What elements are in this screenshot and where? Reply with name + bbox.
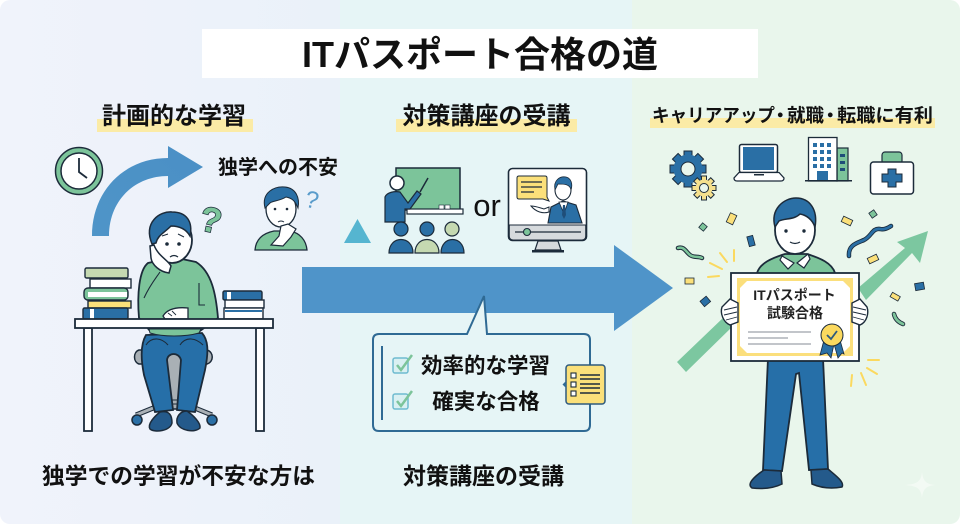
- confetti: [685, 210, 925, 307]
- heading: career: [650, 105, 935, 128]
- icon: gears: [670, 151, 716, 200]
- ribbons: [678, 226, 903, 324]
- left scene: person studying at desk: [75, 212, 273, 431]
- icon: office building: [805, 138, 852, 182]
- title: ITパスポート合格の道: [302, 34, 658, 75]
- torso: [138, 259, 218, 334]
- text: or: or: [473, 188, 501, 223]
- triangle marker: [344, 219, 371, 243]
- collar: [780, 254, 810, 269]
- heading: planned study: 計画的な学習: [102, 103, 246, 130]
- supporting hand: [150, 245, 171, 273]
- shoes: [750, 469, 843, 488]
- heading: career: 転職に有利: [837, 105, 933, 126]
- text: anxiety about self study: 独学への不安: [218, 156, 338, 179]
- certificate: ITパスポート: [753, 287, 836, 303]
- callout: benefits: [373, 296, 605, 431]
- head: [775, 206, 815, 254]
- head: [152, 217, 192, 263]
- heading: course: 対策講座の受講: [402, 103, 570, 130]
- desk: [75, 319, 273, 431]
- rays: [708, 250, 879, 386]
- curved arrow: [92, 146, 203, 236]
- icon: laptop: [734, 144, 784, 181]
- books left stack: [83, 268, 131, 319]
- badge: [820, 324, 844, 358]
- icon: checklist note: [562, 365, 605, 404]
- books right stack: [223, 291, 264, 319]
- shirt under desk: [149, 329, 201, 336]
- caption: left: 独学での学習が不安な方は: [42, 463, 315, 489]
- certificate: [731, 273, 859, 361]
- icon: blue question mark: ?: [303, 186, 321, 215]
- check item 1: 効率的な学習: [421, 354, 550, 378]
- caption: center: 対策講座の受講: [403, 463, 564, 489]
- icon: online lecture monitor: [508, 168, 586, 252]
- hands: [721, 299, 868, 325]
- legs: [142, 333, 207, 412]
- heading: career: 就職: [787, 105, 824, 126]
- hand on desk: [163, 308, 188, 319]
- chair: [132, 350, 217, 425]
- title: [202, 29, 758, 78]
- sparkle: [905, 472, 935, 498]
- icon: clock: [56, 148, 102, 194]
- small thinking person: [255, 187, 307, 250]
- main arrow: [302, 245, 673, 331]
- icon: classroom: [385, 168, 464, 253]
- torso: [757, 254, 835, 280]
- heading: career: キャリアアップ: [652, 105, 775, 126]
- icon: green question mark: ?: [196, 199, 225, 242]
- right scene: person holding certificate: [721, 198, 868, 488]
- growth arrow: [677, 231, 928, 372]
- icon: medical kit: [870, 152, 914, 194]
- certificate: 試験合格: [767, 305, 823, 321]
- legs: [763, 358, 828, 471]
- check item 2: 確実な合格: [432, 390, 540, 414]
- heading: career: ・: [821, 105, 840, 126]
- heading: career: ・: [771, 105, 790, 126]
